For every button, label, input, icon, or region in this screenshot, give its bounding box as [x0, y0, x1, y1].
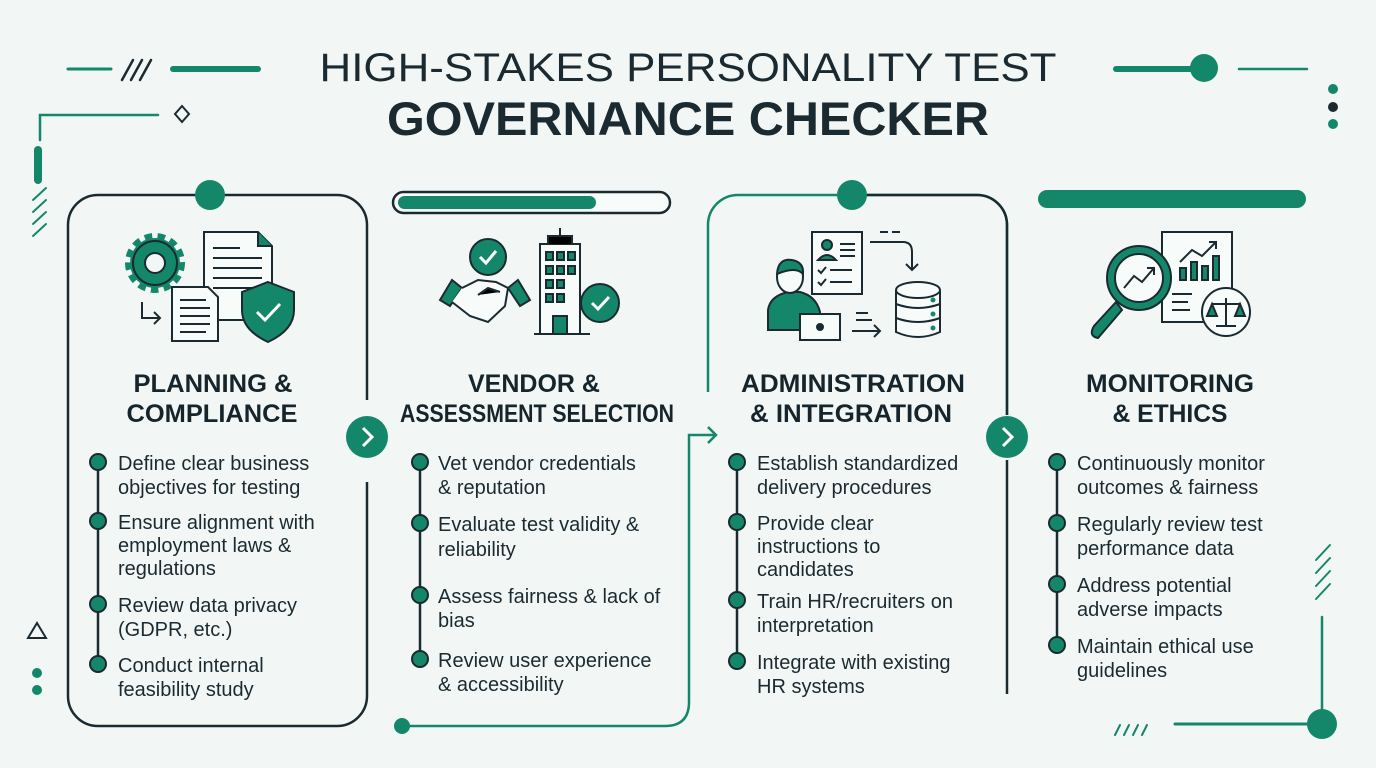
bullet list: candidates [757, 559, 854, 581]
bullet list [412, 453, 661, 696]
title: GOVERNANCE CHECKER [387, 92, 989, 145]
bullet list [90, 453, 315, 701]
bullet list [729, 453, 958, 698]
progress bar [393, 192, 670, 213]
panel: administration & integration [708, 180, 1007, 698]
bullet list: reliability [438, 539, 516, 561]
title: HIGH-STAKES PERSONALITY TEST [320, 46, 1056, 90]
bullet list: employment laws & [118, 535, 292, 557]
title [320, 46, 1056, 145]
decoration: top left lines [33, 60, 258, 236]
bullet list: Define clear business [118, 453, 309, 475]
panel: monitoring & ethics [1038, 190, 1306, 682]
bullet list: Provide clear [757, 513, 874, 535]
bullet list: Assess fairness & lack of [438, 586, 661, 608]
bullet list: objectives for testing [118, 477, 300, 499]
icon: magnifier, chart, scales [1092, 232, 1250, 338]
heading [400, 370, 674, 428]
bullet list: Vet vendor credentials [438, 453, 636, 475]
bullet list: feasibility study [118, 679, 254, 701]
icon: gear, documents, shield [130, 232, 294, 342]
heading: COMPLIANCE [126, 400, 298, 428]
bullet list: Regularly review test [1077, 514, 1263, 536]
heading [741, 370, 965, 428]
bullet list [1049, 453, 1265, 682]
decoration: left bottom [28, 623, 46, 695]
bullet list: & accessibility [438, 674, 564, 696]
bullet list: & reputation [438, 477, 546, 499]
bullet list: Continuously monitor [1077, 453, 1265, 475]
heading: VENDOR & [468, 370, 600, 398]
heading [1086, 370, 1254, 428]
heading: & ETHICS [1112, 400, 1228, 428]
bullet list: HR systems [757, 676, 865, 698]
bullet list: Establish standardized [757, 453, 958, 475]
bullet list: Conduct internal [118, 655, 264, 677]
heading: ASSESSMENT SELECTION [400, 400, 674, 428]
arrow: connector to administration [394, 427, 716, 734]
bullet list: Ensure alignment with [118, 512, 315, 534]
bullet list: instructions to [757, 536, 880, 558]
bullet list: Maintain ethical use [1077, 636, 1254, 658]
panel: planning & compliance [68, 180, 367, 726]
bullet list: (GDPR, etc.) [118, 619, 232, 641]
arrow: chevron 1 [346, 416, 388, 458]
decoration: top right slider [1116, 54, 1338, 129]
progress bar [1038, 190, 1306, 208]
bullet list: regulations [118, 558, 216, 580]
bullet list: delivery procedures [757, 477, 932, 499]
bullet list: bias [438, 610, 475, 632]
heading [126, 370, 298, 428]
icon: person, form, database [768, 232, 940, 340]
bullet list: Review data privacy [118, 595, 297, 617]
arrow: chevron 2 [986, 416, 1028, 458]
panel: vendor & assessment selection [393, 192, 674, 696]
bullet list: Address potential [1077, 575, 1232, 597]
bullet list: adverse impacts [1077, 599, 1223, 621]
bullet list: interpretation [757, 615, 874, 637]
heading: ADMINISTRATION [741, 370, 965, 398]
bullet list: Review user experience [438, 650, 651, 672]
bullet list: guidelines [1077, 660, 1167, 682]
bullet list: outcomes & fairness [1077, 477, 1258, 499]
icon: handshake and building [440, 228, 619, 334]
heading: MONITORING [1086, 370, 1254, 398]
decoration: right bottom [1115, 545, 1337, 739]
bullet list: Integrate with existing [757, 652, 950, 674]
heading: PLANNING & [134, 370, 292, 398]
bullet list: Evaluate test validity & [438, 514, 640, 536]
bullet list: performance data [1077, 538, 1235, 560]
heading: & INTEGRATION [750, 400, 952, 428]
bullet list: Train HR/recruiters on [757, 591, 953, 613]
